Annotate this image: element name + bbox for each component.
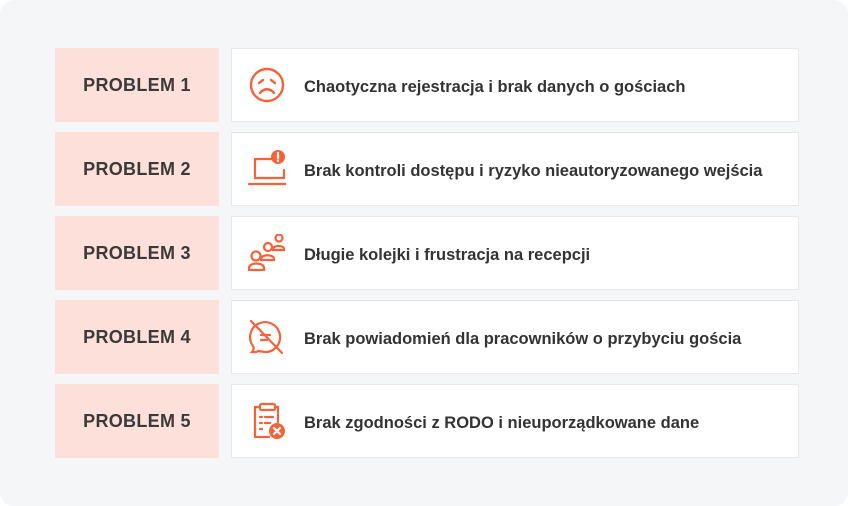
- text: Chaotyczna rejestracja i brak danych o gościach: [304, 78, 685, 96]
- text: Brak kontroli dostępu i ryzyko nieautoryzowanego wejścia: [304, 162, 762, 180]
- label: problem 4: [55, 300, 219, 374]
- icon: muted chat: [248, 320, 284, 354]
- label: problem 3: [55, 216, 219, 290]
- card: problem 5: [231, 384, 799, 458]
- icon: queue people: [248, 234, 286, 272]
- icon: laptop alert: [248, 150, 286, 186]
- card: problem 4: [231, 300, 799, 374]
- text: Długie kolejki i frustracja na recepcji: [304, 246, 590, 264]
- label: problem 4: PROBLEM 4: [83, 327, 191, 347]
- card: problem 1: [231, 48, 799, 122]
- card: problem 2: [231, 132, 799, 206]
- text: Brak zgodności z RODO i nieuporządkowane dane: [304, 414, 699, 432]
- label: problem 2: PROBLEM 2: [83, 159, 191, 179]
- label: problem 3: PROBLEM 3: [83, 243, 191, 263]
- icon: sad face: [250, 68, 284, 102]
- row: problem 2: [55, 132, 799, 206]
- label: problem 1: [55, 48, 219, 122]
- label: problem 1: PROBLEM 1: [83, 75, 191, 95]
- row: problem 4: [55, 300, 799, 374]
- row: problem 1: [55, 48, 799, 122]
- label: problem 5: PROBLEM 5: [83, 411, 191, 431]
- row: problem 5: [55, 384, 799, 458]
- icon: clipboard error: [254, 402, 285, 439]
- text: Brak powiadomień dla pracowników o przybyciu gościa: [304, 330, 741, 348]
- label: problem 5: [55, 384, 219, 458]
- card: problem 3: [231, 216, 799, 290]
- label: problem 2: [55, 132, 219, 206]
- row: problem 3: [55, 216, 799, 290]
